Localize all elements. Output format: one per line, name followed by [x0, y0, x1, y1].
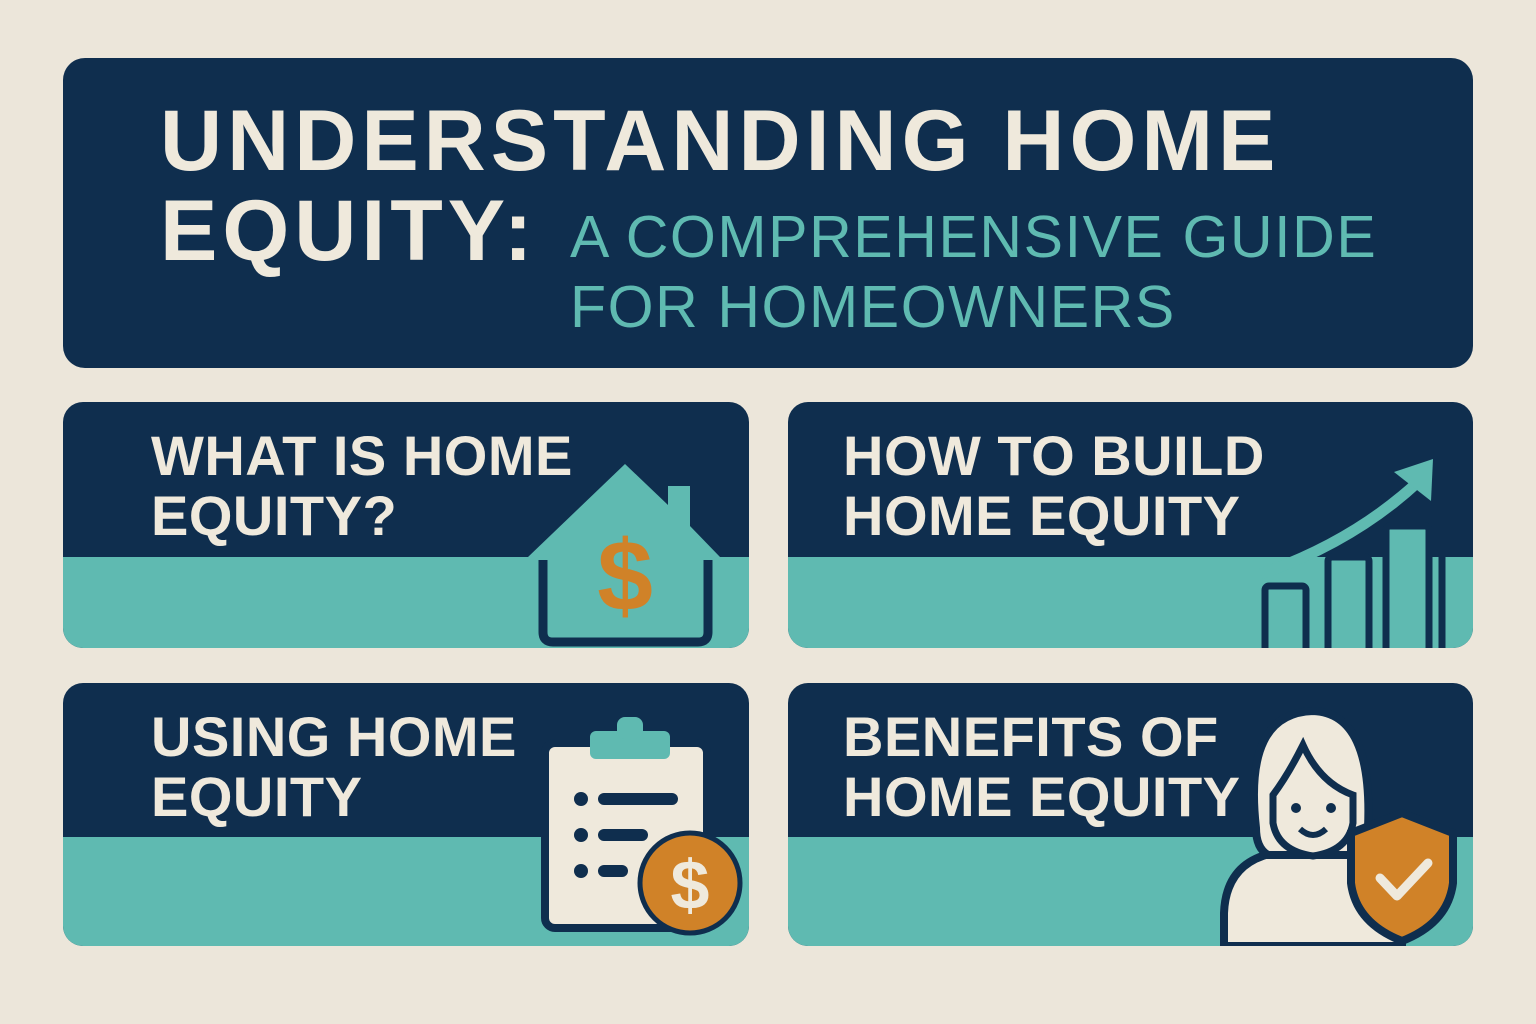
heading: HOME EQUITY — [843, 765, 1241, 828]
title — [160, 93, 1280, 279]
panel: benefits of home equity — [788, 683, 1473, 946]
heading: USING HOME — [151, 705, 517, 768]
icon: clipboard with coin — [541, 717, 742, 936]
title: UNDERSTANDING HOME — [160, 93, 1280, 189]
title: EQUITY: — [160, 183, 537, 279]
panel: how to build home equity — [788, 402, 1473, 648]
heading: EQUITY — [151, 765, 362, 828]
icon: person with shield — [1220, 715, 1457, 946]
panel: what is home equity — [63, 402, 749, 648]
heading: EQUITY? — [151, 484, 397, 547]
heading: BENEFITS OF — [843, 705, 1219, 768]
subtitle: FOR HOMEOWNERS — [570, 274, 1176, 340]
heading: WHAT IS HOME — [151, 424, 573, 487]
panel: using home equity — [63, 683, 749, 946]
icon: house with dollar: $ — [597, 520, 653, 632]
heading — [843, 705, 1241, 828]
icon: house with dollar — [528, 464, 720, 646]
header panel — [63, 58, 1473, 368]
subtitle: A COMPREHENSIVE GUIDE — [570, 204, 1377, 270]
heading — [843, 424, 1265, 547]
heading — [151, 705, 517, 828]
subtitle — [570, 204, 1377, 340]
icon: clipboard with coin: $ — [671, 846, 709, 924]
heading — [151, 424, 573, 547]
heading: HOME EQUITY — [843, 484, 1241, 547]
icon: growth bar chart — [1262, 459, 1446, 648]
heading: HOW TO BUILD — [843, 424, 1265, 487]
